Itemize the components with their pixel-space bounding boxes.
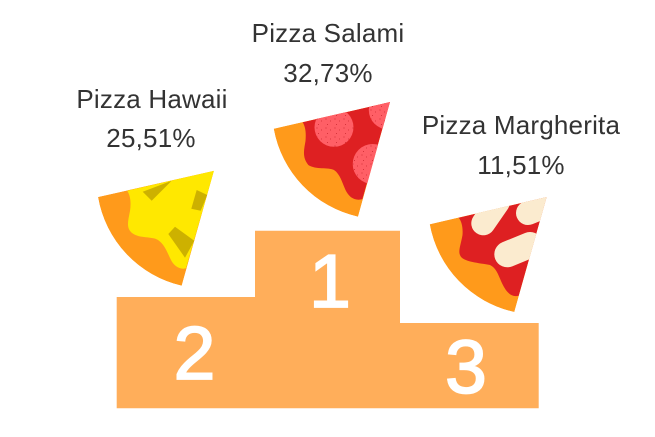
pizza margherita slice — [430, 197, 550, 312]
label: pizza hawaii: 25,51% — [106, 123, 196, 153]
label: pizza salami: Pizza Salami — [252, 18, 404, 48]
label: pizza hawaii: Pizza Hawaii — [76, 84, 228, 114]
label: pizza salami — [252, 18, 404, 88]
number 2: 2 — [174, 311, 215, 395]
label: pizza margherita: 11,51% — [477, 150, 565, 180]
number 1: 1 — [309, 239, 351, 323]
number 3: 3 — [445, 325, 487, 409]
label: pizza margherita — [422, 110, 620, 180]
pizza salami slice — [274, 102, 390, 217]
label: pizza salami: 32,73% — [283, 58, 373, 88]
label: pizza margherita: Pizza Margherita — [422, 110, 620, 140]
podium — [117, 231, 539, 409]
label: pizza hawaii — [76, 84, 228, 153]
pizza hawaii slice — [98, 171, 214, 286]
